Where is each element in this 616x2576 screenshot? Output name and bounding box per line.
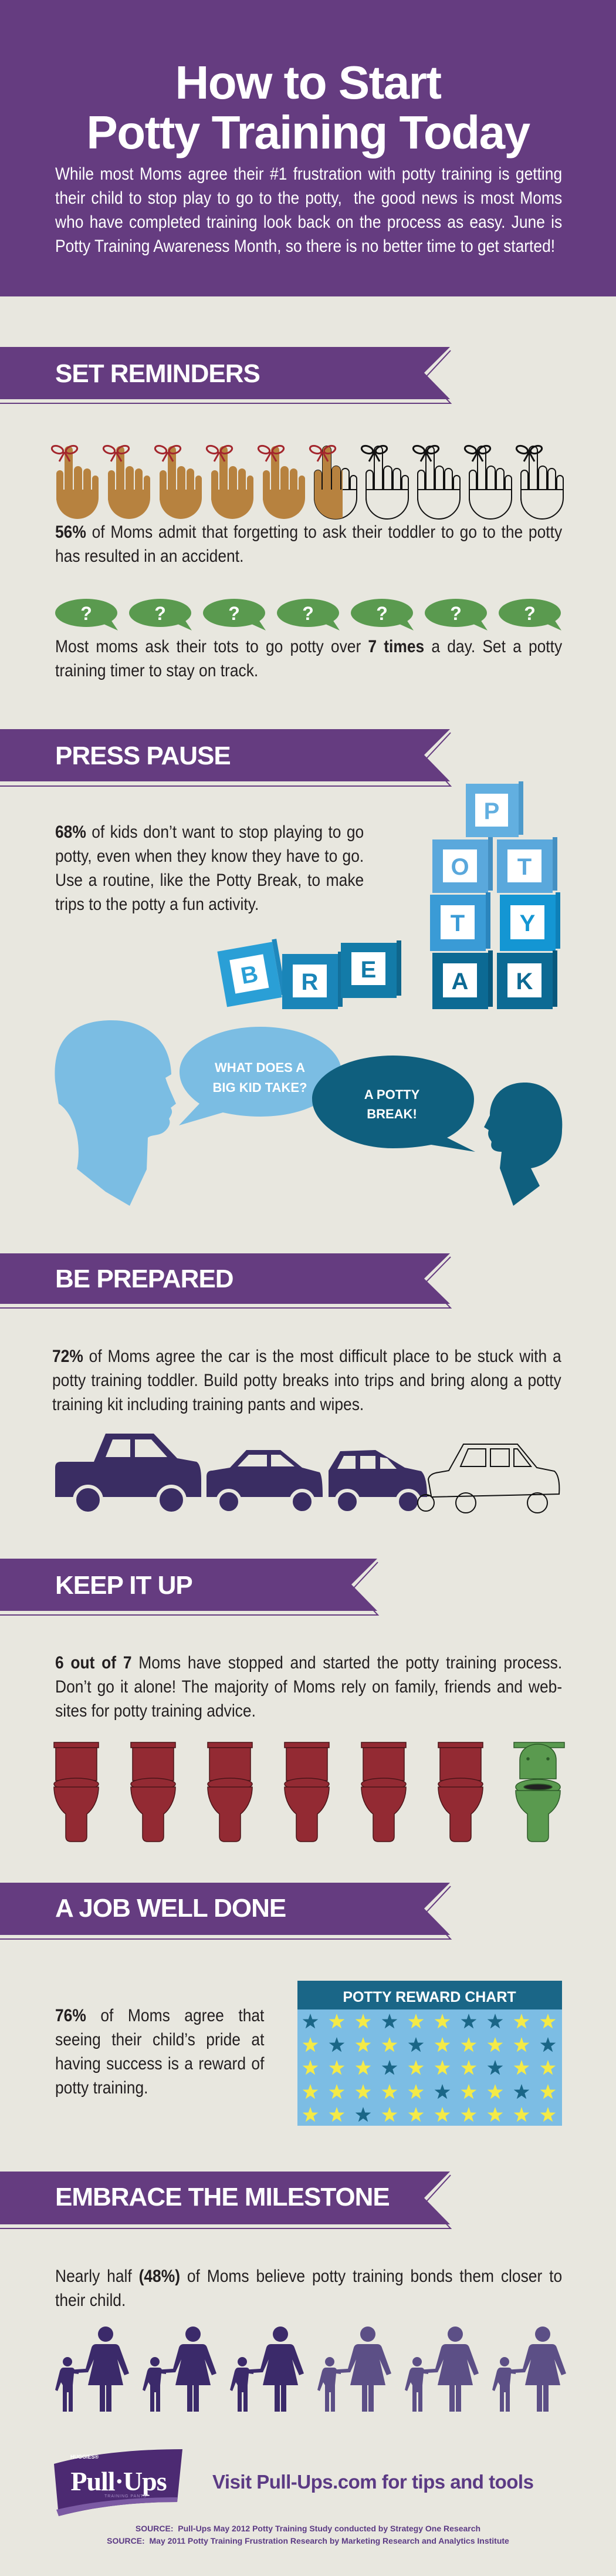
blocks: POTTY BREAK: O xyxy=(451,854,469,880)
sources: SOURCE: Pull-Ups May 2012 Potty Training Study conducted by Strategy One Research xyxy=(136,2524,480,2533)
speech bubble: a potty break xyxy=(312,1056,475,1152)
logo: Pull-Ups: TRAINING PANTS xyxy=(104,2494,147,2499)
logo: Pull-Ups: HUGGIES® xyxy=(70,2454,99,2460)
icon row: question bubbles (7 times) xyxy=(55,599,561,630)
banner: be prepared xyxy=(0,1253,451,1308)
banner: a job well done xyxy=(0,1883,451,1939)
icon row: question bubbles (7 times): ? xyxy=(154,603,166,624)
blocks: POTTY BREAK: A xyxy=(452,969,468,994)
icon row: mother and child figures xyxy=(55,2327,566,2412)
speech bubble: a potty break: A POTTY xyxy=(364,1087,420,1102)
speech bubble: what does a big kid take: BIG KID TAKE? xyxy=(213,1080,307,1095)
heading: keep it up: KEEP IT UP xyxy=(55,1571,192,1600)
heading: embrace the milestone: EMBRACE THE MILESTONE xyxy=(55,2183,390,2211)
logo: Pull-Ups: Pull·Ups xyxy=(70,2466,167,2496)
heading: set reminders: SET REMINDERS xyxy=(55,359,260,388)
banner: set reminders xyxy=(0,347,451,403)
heading: press pause: PRESS PAUSE xyxy=(55,741,231,770)
icon row: question bubbles (7 times): ? xyxy=(302,603,314,624)
title xyxy=(86,56,530,159)
blocks: POTTY BREAK: K xyxy=(516,969,533,994)
banner: press pause xyxy=(0,729,451,786)
silhouette: mom xyxy=(55,1020,176,1206)
toilets: 6 red, 1 green xyxy=(54,1742,564,1842)
intro paragraph: While most Moms agree their #1 frustration with potty training is getting their child to stop play to go to the potty, the good news is most Moms who have completed training look back on the process as easy. June is Potty Training Awareness Month, so there is no better time to get started! xyxy=(55,164,562,256)
blocks: POTTY BREAK: P xyxy=(484,798,499,824)
blocks: POTTY BREAK: B xyxy=(239,961,260,989)
speech bubble: what does a big kid take: WHAT DOES A xyxy=(215,1060,305,1075)
blocks: POTTY BREAK: E xyxy=(361,957,376,983)
logo: Pull-Ups xyxy=(54,2449,182,2516)
sources xyxy=(107,2524,509,2545)
header background xyxy=(0,0,616,296)
title: Potty Training Today xyxy=(86,106,530,159)
sources: SOURCE: May 2011 Potty Training Frustration Research by Marketing Research and Analytics Institute xyxy=(107,2536,509,2545)
icon row: question bubbles (7 times): ? xyxy=(524,603,536,624)
silhouette: child xyxy=(484,1083,562,1206)
title: How to Start xyxy=(175,56,441,109)
blocks: POTTY BREAK: T xyxy=(451,911,465,936)
call to action: Visit Pull-Ups.com for tips and tools xyxy=(212,2471,533,2493)
icon row: question bubbles (7 times): ? xyxy=(450,603,462,624)
text: 56% stat: 56% of Moms admit that forgetting to ask their toddler to go to the potty has resulted in an accident. xyxy=(55,522,562,566)
icon row: tied fingers (56%) xyxy=(51,444,563,519)
blocks: POTTY BREAK xyxy=(217,781,560,1009)
text: 7 times stat: Most moms ask their tots to go potty over 7 times a day. Set a potty training timer to stay on track. xyxy=(55,637,562,680)
icon row: question bubbles (7 times): ? xyxy=(376,603,388,624)
blocks: POTTY BREAK: Y xyxy=(520,911,536,936)
text: 48% stat: Nearly half (48%) of Moms believe potty training bonds them closer to their child. xyxy=(55,2267,562,2310)
blocks: POTTY BREAK: T xyxy=(517,854,532,880)
chart: potty reward chart xyxy=(297,1981,562,2126)
text: 72% stat: 72% of Moms agree the car is the most difficult place to be stuck with a potty training toddler. Build potty breaks into trips and bring along a potty training kit including training pants and wipes. xyxy=(52,1347,561,1414)
speech bubble: a potty break: BREAK! xyxy=(367,1107,417,1121)
icon row: question bubbles (7 times): ? xyxy=(228,603,240,624)
speech bubble: what does a big kid take xyxy=(179,1027,341,1125)
cars xyxy=(55,1434,559,1513)
blocks: POTTY BREAK: R xyxy=(302,969,319,995)
text: 76% stat: 76% of Moms agree that seeing their child’s pride at having success is a reward of potty training. xyxy=(55,2006,264,2098)
heading: be prepared: BE PREPARED xyxy=(55,1265,233,1293)
banner: embrace the milestone xyxy=(0,2172,451,2228)
icon row: question bubbles (7 times): ? xyxy=(80,603,92,624)
text: 6 out of 7 stat: 6 out of 7 Moms have stopped and started the potty training process. Don’t go it alone! The majority of Moms rely on family, friends and web-sites for potty training advice. xyxy=(55,1653,562,1721)
text: 68% stat: 68% of kids don’t want to stop playing to go potty, even when they know they have to go. Use a routine, like the Potty Break, to make trips to the potty a fun activity. xyxy=(55,822,364,914)
heading: a job well done: A JOB WELL DONE xyxy=(55,1894,286,1923)
banner: keep it up xyxy=(0,1559,378,1615)
chart: potty reward chart: POTTY REWARD CHART xyxy=(343,1989,516,2005)
